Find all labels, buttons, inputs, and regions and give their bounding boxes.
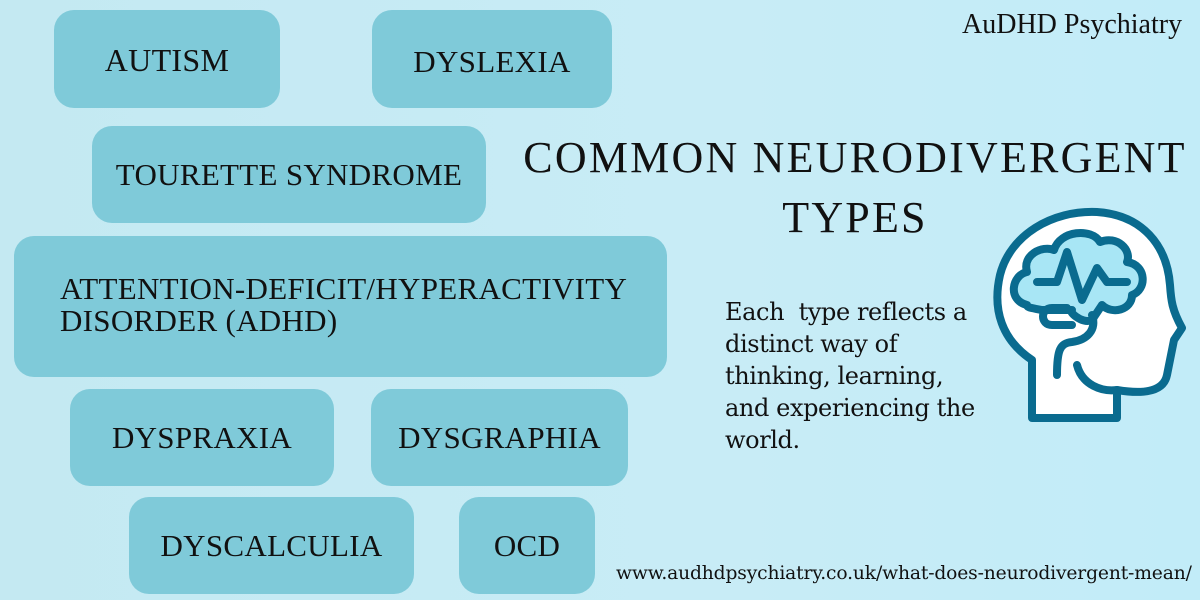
box: dysgraphia bbox=[371, 389, 628, 486]
box: autism: AUTISM bbox=[105, 42, 229, 78]
box: dyscalculia bbox=[129, 497, 414, 594]
title bbox=[523, 133, 1187, 242]
box: tourette: TOURETTE SYNDROME bbox=[116, 156, 462, 192]
description bbox=[725, 298, 975, 454]
box: dyslexia: DYSLEXIA bbox=[413, 44, 571, 79]
brand: AuDHD Psychiatry bbox=[962, 9, 1182, 40]
description: thinking, learning, bbox=[725, 362, 943, 390]
box: adhd bbox=[14, 236, 667, 377]
box: ocd bbox=[459, 497, 595, 594]
box: dyspraxia bbox=[70, 389, 334, 486]
description: Each type reflects a bbox=[725, 298, 967, 326]
box: dyspraxia: DYSPRAXIA bbox=[112, 420, 292, 454]
box: adhd: DISORDER (ADHD) bbox=[60, 302, 337, 338]
box: tourette bbox=[92, 126, 486, 223]
description: distinct way of bbox=[725, 330, 897, 358]
box: dyslexia bbox=[372, 10, 612, 108]
box: dysgraphia: DYSGRAPHIA bbox=[398, 420, 601, 454]
box: adhd: ATTENTION-DEFICIT/HYPERACTIVITY bbox=[60, 270, 627, 306]
box: dyscalculia: DYSCALCULIA bbox=[160, 528, 383, 562]
description: world. bbox=[725, 426, 800, 454]
box: ocd: OCD bbox=[494, 528, 560, 562]
description: and experiencing the bbox=[725, 394, 975, 422]
title: TYPES bbox=[782, 193, 928, 242]
url: www.audhdpsychiatry.co.uk/what-does-neurodivergent-mean/ bbox=[616, 563, 1192, 584]
icon: head with brain bbox=[993, 208, 1186, 422]
title: COMMON NEURODIVERGENT bbox=[523, 133, 1187, 182]
box: autism bbox=[54, 10, 280, 108]
